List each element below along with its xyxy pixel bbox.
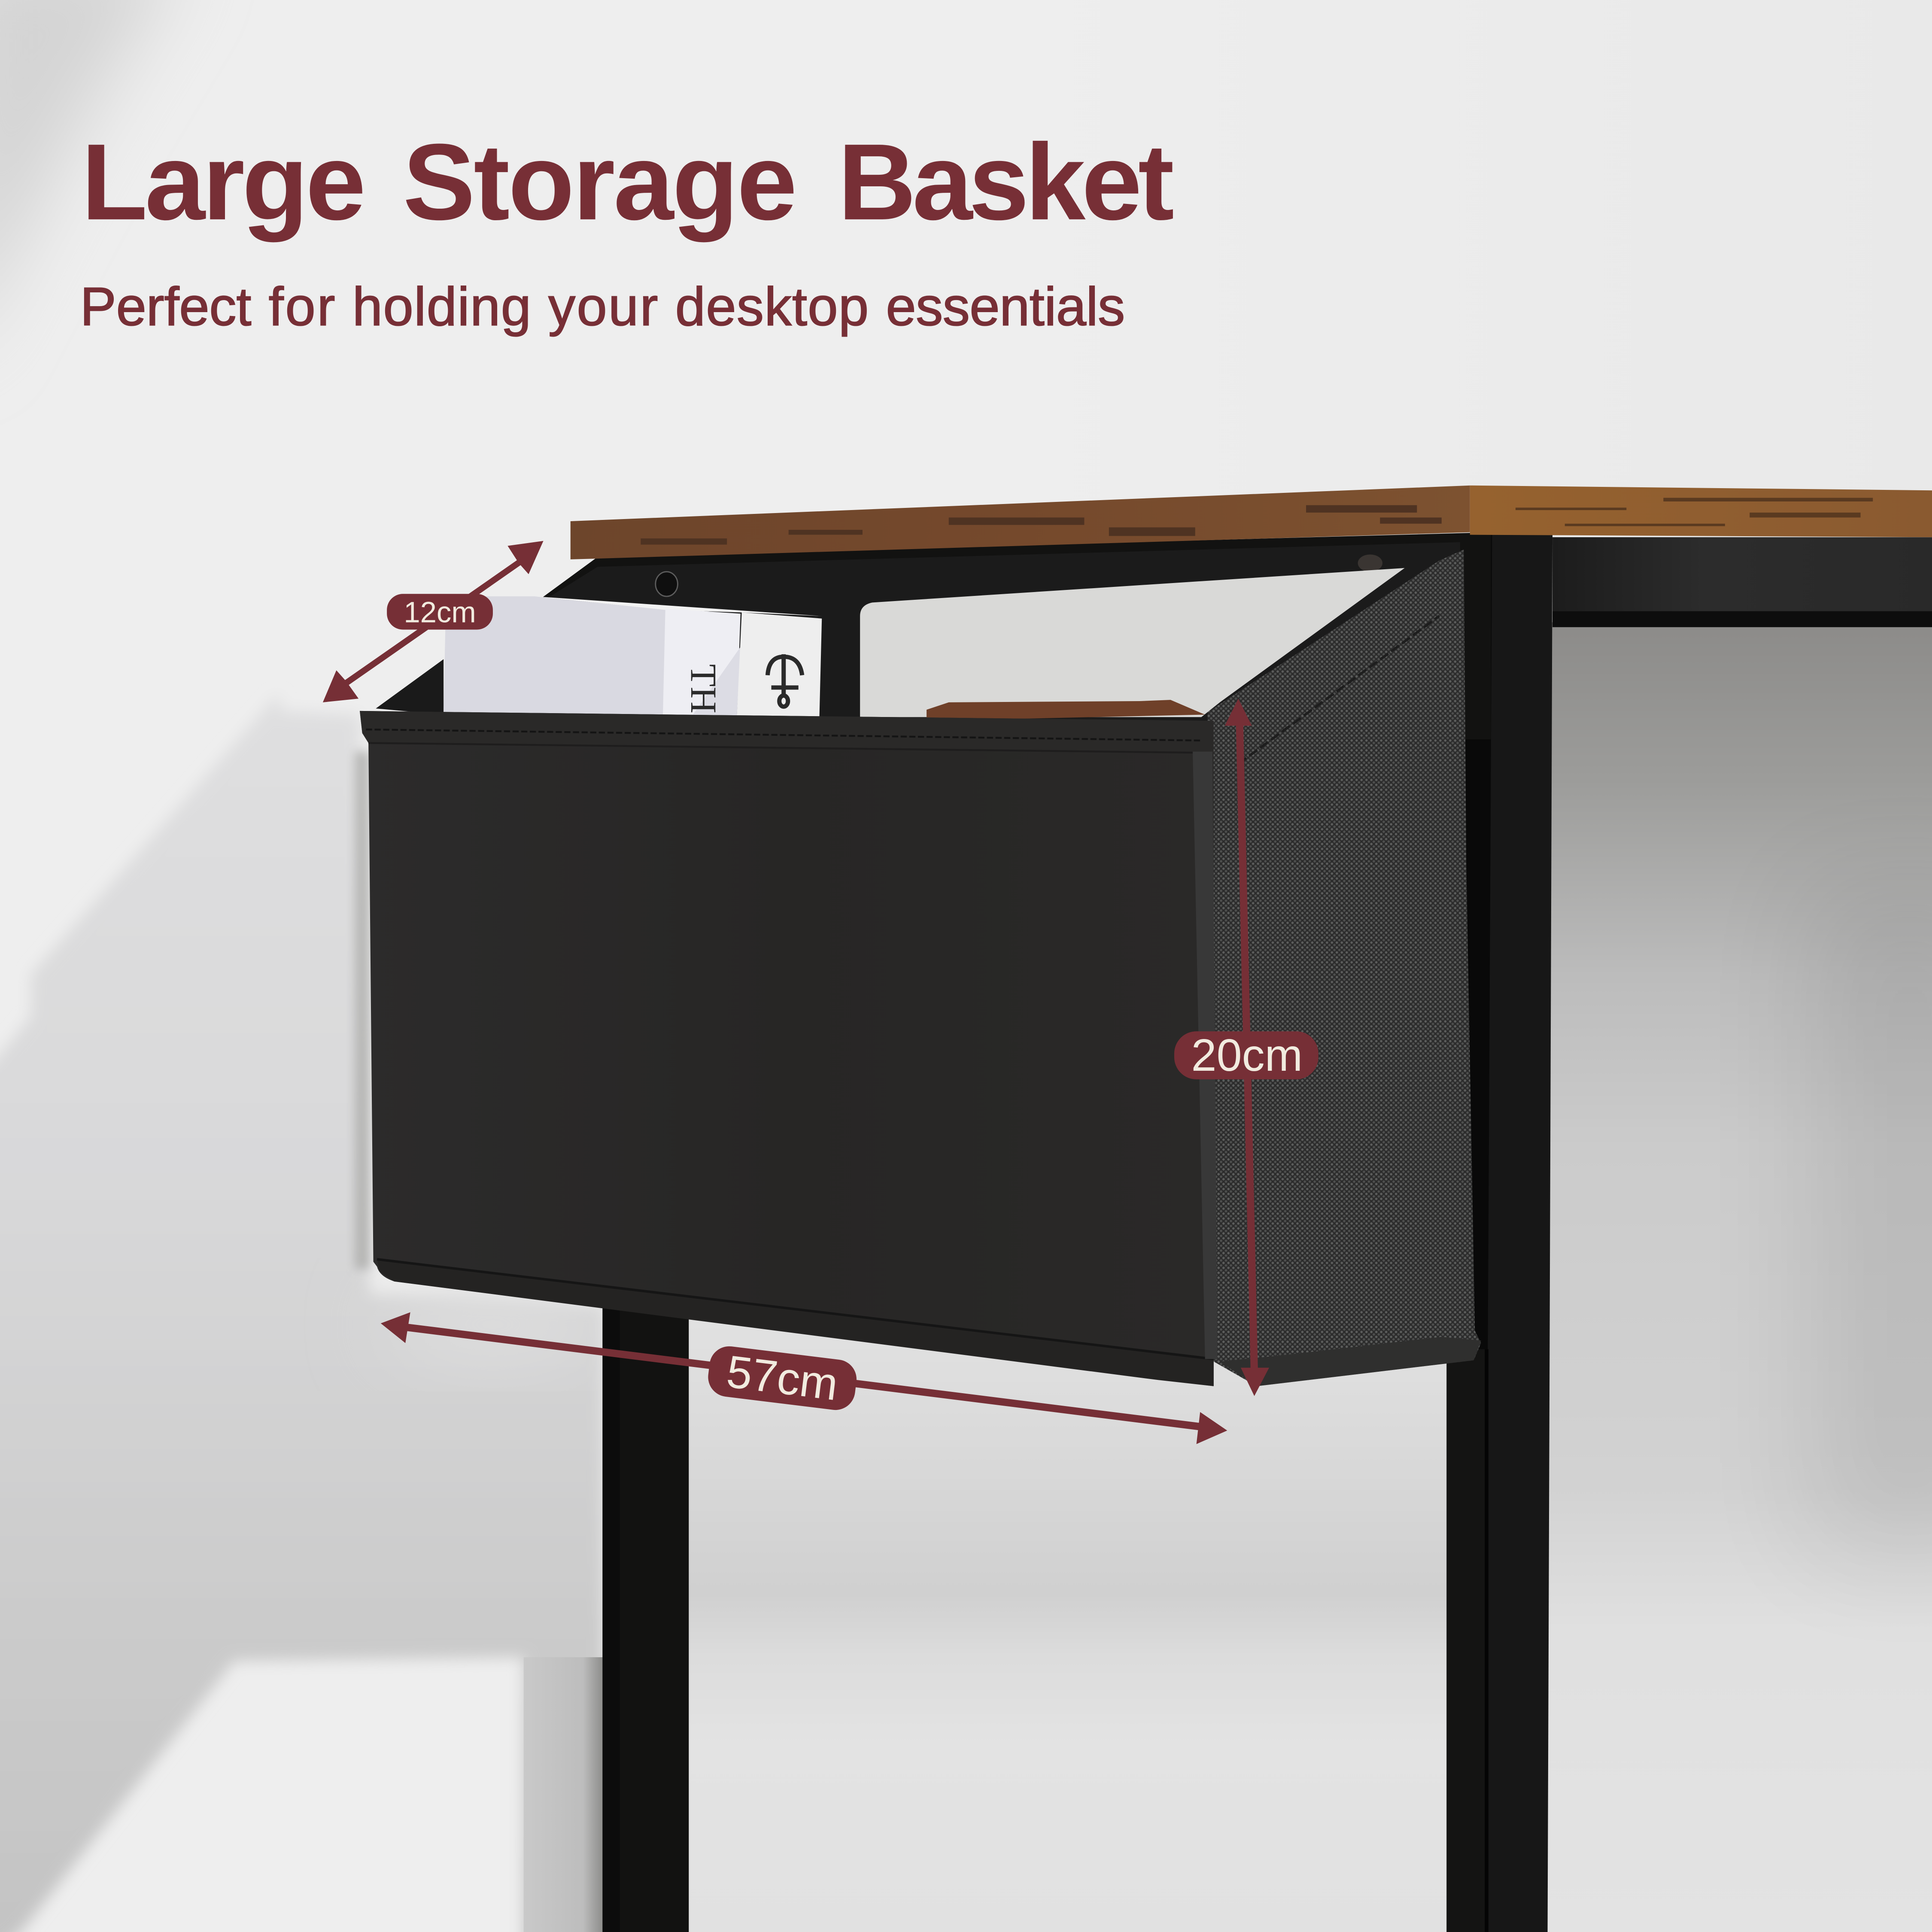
badge: 57cm: 57cm bbox=[724, 1346, 841, 1410]
badge: 12cm: 12cm bbox=[404, 595, 476, 629]
badge: 20cm: 20cm bbox=[1191, 1030, 1303, 1081]
arrow: depth bbox=[323, 541, 544, 702]
title: Basket bbox=[838, 121, 1174, 243]
desk: metal frame and legs bbox=[542, 532, 1932, 1932]
desk top bbox=[571, 486, 1932, 559]
arrow: height bbox=[1225, 699, 1269, 1396]
dimension: depth 12cm bbox=[323, 541, 544, 702]
subtitle: Perfect bbox=[80, 276, 251, 337]
rear rail bbox=[542, 532, 1491, 739]
title: Large bbox=[81, 121, 366, 243]
basket back panel bbox=[376, 542, 1460, 739]
subtitle bbox=[80, 276, 1125, 337]
basket side panel bbox=[1207, 550, 1481, 1386]
book spine bbox=[663, 609, 741, 717]
arrow: width bbox=[381, 1312, 1227, 1444]
right rail bbox=[1552, 537, 1932, 611]
left leg bbox=[602, 1306, 689, 1932]
white book face bbox=[444, 596, 667, 717]
title bbox=[81, 121, 1174, 243]
dark inner frame bbox=[1452, 535, 1496, 1373]
basket front panel bbox=[360, 711, 1217, 1386]
subtitle: essentials bbox=[886, 276, 1125, 337]
second book with anchor bbox=[737, 612, 822, 717]
title: Storage bbox=[403, 121, 797, 243]
subtitle: for bbox=[269, 276, 335, 337]
snap fastener left bbox=[656, 572, 677, 596]
tablet and wallet in basket bbox=[860, 568, 1405, 721]
dimension: height 20cm bbox=[1174, 699, 1318, 1396]
subtitle: holding bbox=[352, 276, 531, 337]
books in basket: TH bbox=[683, 664, 724, 714]
right front leg bbox=[1485, 535, 1552, 1932]
books in basket bbox=[444, 596, 822, 717]
icon: anchor bbox=[768, 654, 802, 707]
subtitle: desktop bbox=[675, 276, 869, 337]
right lower leg side bbox=[1446, 1349, 1488, 1932]
badge: 12cm bbox=[387, 594, 493, 630]
snap fastener right bbox=[1358, 554, 1382, 572]
dimension: width 57cm bbox=[381, 1312, 1227, 1444]
subtitle: your bbox=[548, 276, 658, 337]
